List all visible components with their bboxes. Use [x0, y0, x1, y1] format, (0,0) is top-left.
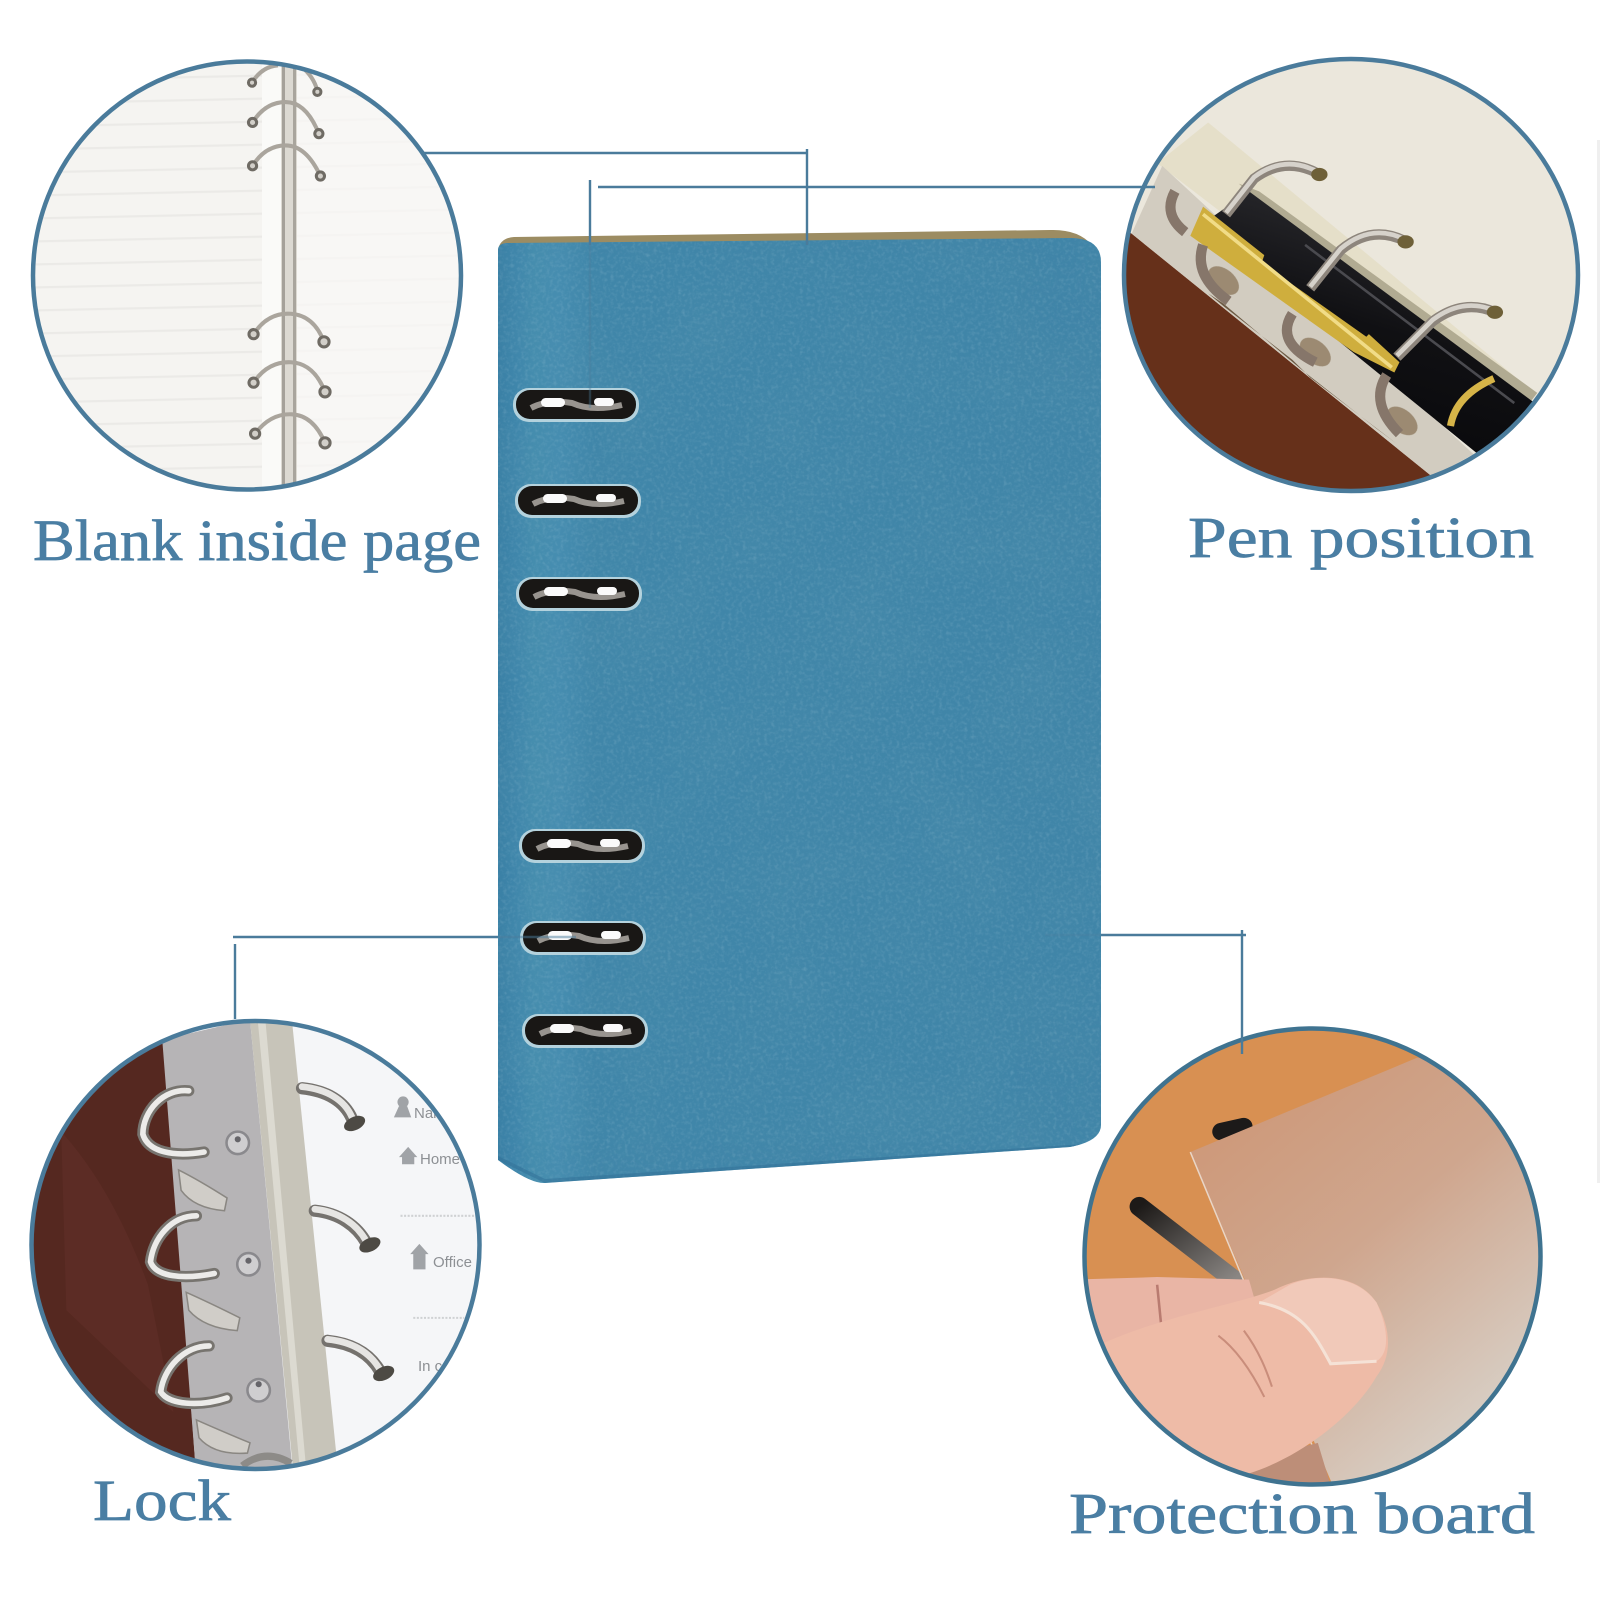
brown cover — [34, 1044, 195, 1458]
form text — [414, 1105, 472, 1375]
bottom ring — [242, 1456, 291, 1466]
circle border — [1124, 59, 1578, 491]
leader line: pen position — [590, 180, 1155, 408]
thumb nail — [1259, 1278, 1386, 1364]
label: protection board: Protection board — [1069, 1481, 1535, 1546]
circle border — [33, 62, 461, 490]
frosted board — [1190, 1058, 1555, 1494]
form text: Office — [433, 1254, 472, 1271]
panel: protection board — [1069, 1019, 1555, 1546]
form text: Home — [420, 1151, 460, 1168]
slot 2 — [515, 484, 641, 518]
spine band — [250, 1019, 337, 1473]
left rings — [143, 1091, 227, 1403]
lower ring pockets — [1208, 266, 1418, 436]
slot 1 — [513, 388, 639, 422]
notebook page edge — [498, 230, 1092, 250]
slot 3 — [516, 577, 642, 611]
photo: open rings and plate — [26, 1014, 490, 1479]
right rings — [302, 1088, 380, 1371]
panel: blank inside page — [30, 58, 481, 573]
inner gutter — [1239, 184, 1537, 423]
leader line: protection board — [1045, 930, 1246, 1054]
photo: frosted board held by fingers — [1086, 1030, 1538, 1482]
slot 6 — [522, 1014, 648, 1048]
pen body — [1198, 191, 1535, 457]
rivets — [227, 1132, 270, 1402]
thumb — [1106, 1278, 1388, 1474]
photo: ring binder with lined pages — [30, 58, 464, 494]
lower wrist — [1250, 1443, 1330, 1482]
orange cover — [1086, 1030, 1421, 1482]
label: lock: Lock — [93, 1468, 231, 1533]
lower lobes — [179, 1170, 250, 1453]
label: blank inside page: Blank inside page — [33, 508, 481, 573]
page — [194, 1026, 477, 1460]
notebook — [498, 230, 1101, 1190]
gold pen band — [1451, 379, 1494, 426]
punched slots — [1221, 1127, 1244, 1132]
slot 5 — [520, 921, 646, 955]
brown cover — [1126, 233, 1430, 489]
panel: lock — [26, 1014, 490, 1533]
silver plate — [162, 1019, 293, 1479]
form icons — [394, 1096, 429, 1269]
paper — [1130, 61, 1576, 474]
circle border — [1084, 1028, 1540, 1484]
photo: pen held in binder rings — [1126, 61, 1576, 489]
panel: pen position — [1116, 51, 1591, 570]
leader line: blank inside page — [424, 149, 807, 245]
circle border — [32, 1021, 480, 1469]
leader line: lock — [233, 937, 576, 1019]
right edge strip — [1597, 140, 1600, 1183]
form text: Name — [414, 1105, 454, 1122]
slot 4 — [519, 829, 645, 863]
metal plate — [1132, 166, 1473, 477]
notebook cover — [498, 230, 1101, 1190]
form text: In case — [418, 1358, 466, 1375]
form dividers — [401, 1216, 477, 1318]
binder rod — [281, 58, 297, 494]
thumb creases — [1218, 1331, 1272, 1397]
back finger — [1088, 1277, 1254, 1343]
gold clip — [1190, 207, 1399, 372]
binder rings — [248, 65, 330, 448]
rings — [1226, 166, 1495, 357]
label: pen position: Pen position — [1188, 505, 1534, 570]
